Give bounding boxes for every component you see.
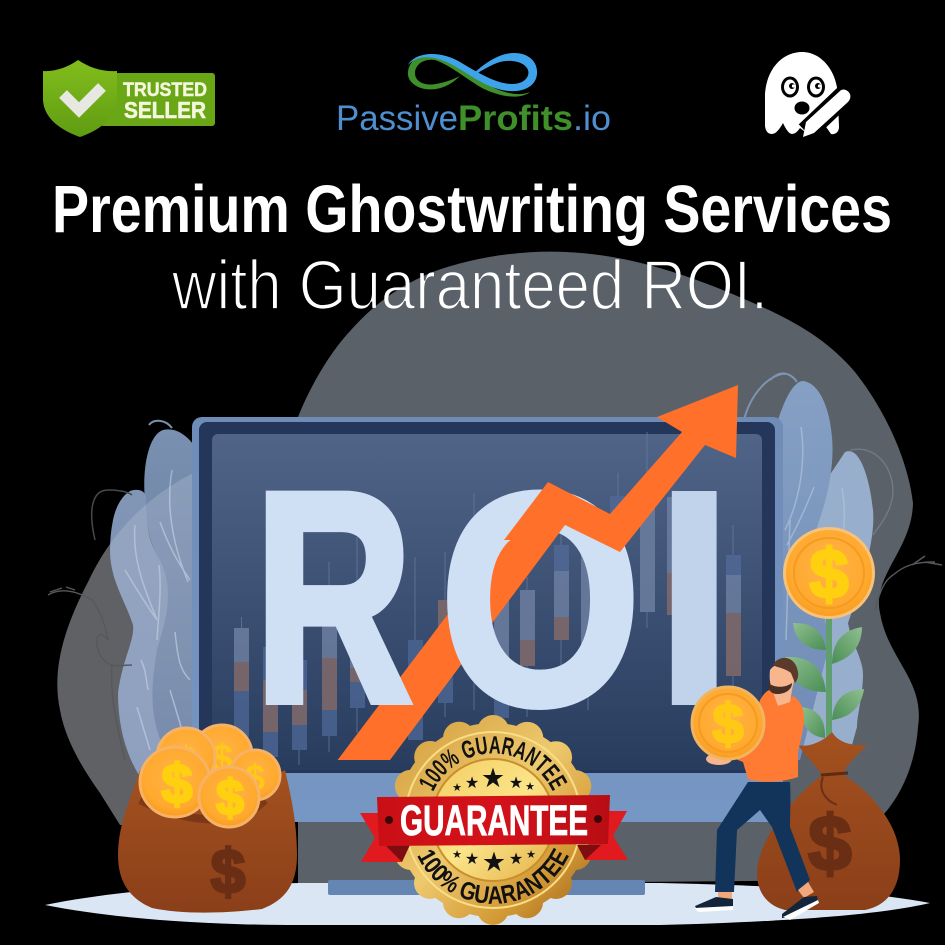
seal top arc text: 100% GUARANTEE <box>420 736 568 792</box>
title <box>52 172 892 324</box>
seal stars: ★ <box>481 763 505 793</box>
icon: coin pile: $ <box>216 770 244 826</box>
legs <box>715 782 810 892</box>
icon: coin on plant <box>784 528 874 618</box>
beard <box>768 683 792 694</box>
seal stars: ★ <box>452 782 462 794</box>
seal stars: ★ <box>465 851 479 868</box>
icon: coin pile: $ <box>175 739 197 783</box>
money bag left with coins <box>118 725 297 913</box>
icon: held coin: $ <box>712 692 744 755</box>
left blob translucent overlay <box>57 472 195 825</box>
foliage: right leaves <box>744 373 942 760</box>
big ROI lettering <box>254 423 737 771</box>
seal stars: ★ <box>526 849 536 861</box>
seal stars: ★ <box>509 851 523 868</box>
logo: PassiveProfits.io: Profits <box>458 99 573 138</box>
icon: coin on plant: $ <box>810 535 848 613</box>
logo: PassiveProfits.io: .io <box>573 99 611 138</box>
logo: PassiveProfits.io <box>336 53 611 138</box>
logo: PassiveProfits.io: Passive <box>336 99 458 138</box>
icon: coin pile: $ <box>161 752 193 815</box>
icon: ghost with pencil <box>765 52 850 137</box>
seal stars: ★ <box>482 847 506 877</box>
badge: trusted seller <box>43 60 215 137</box>
money bag right <box>757 732 900 910</box>
money bag left with coins: $ <box>211 838 245 907</box>
monitor <box>192 417 783 822</box>
shoes <box>695 896 818 918</box>
badge: trusted seller: TRUSTED <box>123 80 207 101</box>
left backing blob <box>57 472 195 825</box>
arrow: upper section over letters <box>504 385 738 552</box>
decorative vine left <box>48 587 132 760</box>
icon: coin pile: $ <box>245 757 265 798</box>
arrow: lower section behind letters <box>338 540 554 760</box>
hair <box>773 658 798 683</box>
seal stars <box>452 763 536 877</box>
big ROI lettering: O <box>439 430 642 768</box>
icon: held coin <box>692 687 764 759</box>
seal stars: ★ <box>509 775 523 792</box>
icon: coin pile <box>140 725 280 827</box>
icon: coin pile: $ <box>211 737 233 781</box>
title line 2: with Guaranteed ROI. <box>171 246 768 324</box>
hoodie <box>730 690 804 782</box>
ground ellipse <box>45 883 930 925</box>
money bag right: $ <box>808 799 852 887</box>
plant with coin <box>784 528 874 738</box>
ribbon: GUARANTEE <box>400 797 588 845</box>
seal stars: ★ <box>465 775 479 792</box>
person carrying coin <box>692 658 819 920</box>
big ROI lettering: I <box>651 423 737 771</box>
seal bottom arc text: 100% GUARANTEE <box>417 848 569 904</box>
seal stars: ★ <box>525 781 535 793</box>
neck and face <box>770 664 796 706</box>
guarantee seal <box>360 715 628 925</box>
badge: trusted seller: SELLER <box>124 97 206 123</box>
seal stars: ★ <box>452 849 462 861</box>
hand <box>706 753 732 765</box>
big ROI lettering: R <box>254 429 413 765</box>
monitor stand base <box>328 880 645 895</box>
icon: infinity <box>408 53 537 97</box>
foliage: left leaves <box>92 421 195 790</box>
background blob <box>298 252 919 885</box>
ribbon <box>360 795 628 862</box>
candlestick chart <box>234 432 741 765</box>
